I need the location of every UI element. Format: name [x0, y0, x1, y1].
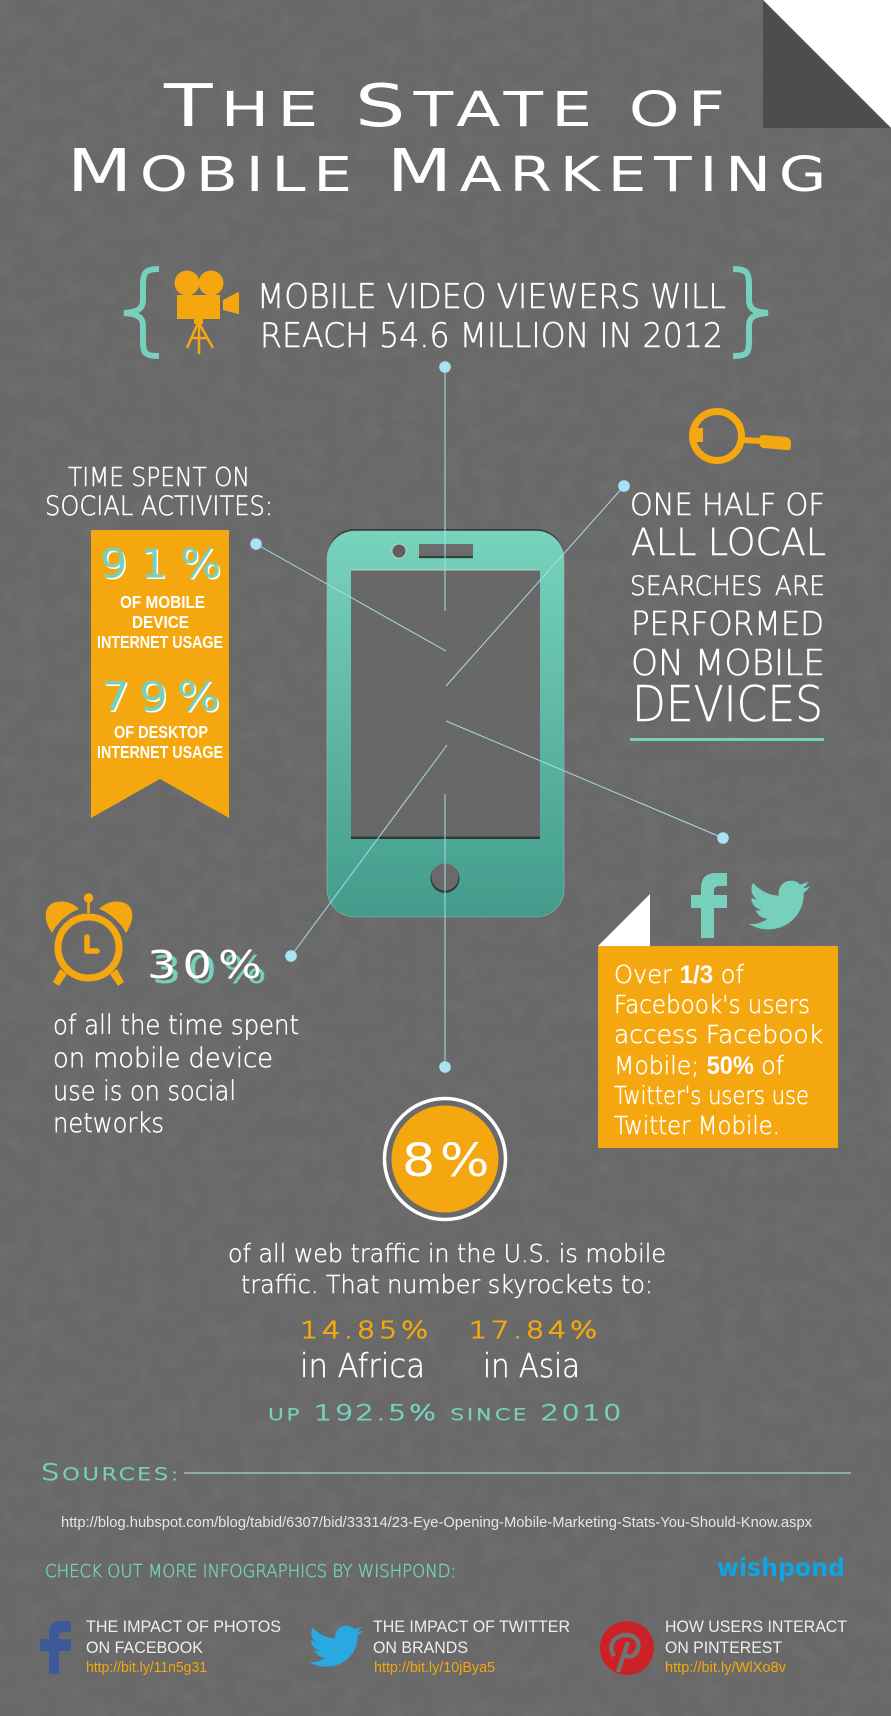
- icon: facebook f teal: [691, 873, 727, 938]
- icon: facebook f blue: [40, 1621, 71, 1674]
- logo: wishpond: wishpond: [717, 1553, 845, 1582]
- stat: 91%: 91%: [100, 542, 234, 588]
- promo: facebook article: THE IMPACT OF PHOTOS: [86, 1617, 281, 1636]
- title: M OBILE M ARKETING: [67, 136, 834, 205]
- text: time spent on social networks: networks: [53, 1108, 164, 1139]
- panel: facebook and twitter callout: Twitter Mobile.: [614, 1111, 780, 1140]
- stat: 30%: 30%: [147, 943, 268, 987]
- panel: facebook and twitter callout: Over 1/3 of: [614, 960, 744, 989]
- title: T HE S TATE OF: [163, 71, 733, 140]
- promo: twitter article: THE IMPACT OF TWITTER: [373, 1617, 570, 1636]
- source url: http://blog.hubspot.com/blog/tabid/6307/bid/33314/23-Eye-Opening-Mobile-Marketing-Stats-You-Should-Know.aspx: [61, 1514, 812, 1531]
- text: time spent on social networks: use is on social: [53, 1076, 236, 1107]
- stat: africa: 14.85%: [300, 1318, 432, 1344]
- text: time spent on social networks: of all the time spent: [53, 1010, 299, 1041]
- panel: orange ribbon: [91, 530, 236, 818]
- stat: africa: [300, 1318, 432, 1385]
- stat: asia: [469, 1318, 601, 1385]
- folded page corner: [763, 0, 891, 128]
- badge: 8%: 8%: [402, 1134, 494, 1187]
- promo: pinterest article: http://bit.ly/WlXo8v: [665, 1660, 787, 1676]
- text: one half of local searches: ALL LOCAL: [631, 521, 826, 564]
- heading: time spent on social: [45, 463, 273, 522]
- panel: facebook and twitter callout: access Facebook: [614, 1020, 823, 1049]
- sources heading: S OURCES:: [41, 1461, 181, 1486]
- stat: asia: 17.84%: [469, 1318, 601, 1344]
- heading: time spent on social: TIME SPENT ON: [68, 463, 250, 493]
- stat: 30%: 30%: [152, 948, 273, 992]
- connector dots: [250, 361, 729, 1073]
- connector lines: [256, 367, 723, 1067]
- promo: twitter article: http://bit.ly/10jBya5: [374, 1660, 495, 1676]
- promo: pinterest article: ON PINTEREST: [665, 1638, 782, 1657]
- label: of mobile device internet usage: [97, 592, 223, 652]
- right brace: [733, 269, 768, 356]
- icon: alarm clock: [46, 893, 132, 986]
- promo: facebook article: ON FACEBOOK: [86, 1638, 204, 1657]
- heading: time spent on social: SOCIAL ACTIVITES:: [45, 491, 273, 522]
- stat: 79%: 79%: [102, 676, 230, 722]
- panel: facebook and twitter callout: Twitter's users use: [614, 1081, 809, 1110]
- promo: pinterest article: [600, 1617, 847, 1676]
- text: one half of local searches: ON MOBILE: [631, 643, 825, 684]
- text: up since 2010: UP 192.5% SINCE 2010: [268, 1401, 624, 1425]
- promo: pinterest article: HOW USERS INTERACT: [665, 1617, 847, 1636]
- promo: facebook article: http://bit.ly/11n5g31: [86, 1660, 207, 1676]
- callout: mobile video viewers: REACH 54.6 MILLION IN 2012: [260, 316, 723, 356]
- phone camera: [392, 544, 406, 558]
- headline text: MOBILE VIDEO VIEWERS WILL: [257, 277, 726, 317]
- stat: 91%: 91%: [102, 543, 236, 589]
- icon: pinterest: [600, 1621, 654, 1675]
- left brace: [124, 269, 159, 356]
- title: [67, 71, 834, 205]
- promo: twitter article: [309, 1617, 570, 1676]
- label: of mobile device internet usage: INTERNET USAGE: [97, 632, 223, 652]
- panel: facebook and twitter callout: Mobile; 50% of: [614, 1051, 784, 1080]
- text: one half of local searches: PERFORMED: [631, 604, 824, 643]
- icon: film camera: [174, 270, 239, 354]
- promo: twitter article: ON BRANDS: [373, 1638, 468, 1657]
- text: time spent on social networks: on mobile device: [53, 1043, 273, 1074]
- text: web traffic: of all web traffic in the U.S. is mobile: [228, 1239, 666, 1268]
- label: of desktop internet usage: OF DESKTOP: [114, 722, 208, 742]
- label: of mobile device internet usage: DEVICE: [132, 612, 189, 632]
- icon: twitter bird blue: [309, 1626, 363, 1667]
- label: of desktop internet usage: INTERNET USAGE: [97, 742, 223, 762]
- text: one half of local searches: SEARCHES ARE: [630, 571, 825, 602]
- text: one half of local searches: [630, 488, 826, 741]
- phone speaker: [419, 544, 473, 558]
- stat: asia: in Asia: [483, 1346, 580, 1385]
- icon: phone: [327, 529, 564, 917]
- text: check out more: CHECK OUT MORE INFOGRAPHICS BY WISHPOND:: [45, 1561, 456, 1582]
- label: of desktop internet usage: [97, 722, 223, 762]
- badge: 8%: [384, 1098, 506, 1220]
- callout: mobile video viewers: [124, 269, 768, 356]
- text: web traffic: [228, 1239, 666, 1299]
- panel: facebook and twitter callout: Facebook's users: [614, 990, 810, 1019]
- phone screen: [351, 570, 540, 838]
- icon: magnifying glass: [692, 412, 791, 460]
- text: one half of local searches: ONE HALF OF: [630, 488, 825, 523]
- text: time spent on social networks: [53, 1010, 299, 1139]
- text: web traffic: traffic. That number skyrockets to:: [241, 1270, 653, 1299]
- promo: facebook article: [40, 1617, 281, 1676]
- text: one half of local searches: DEVICES: [632, 676, 823, 733]
- stat: 79%: 79%: [101, 674, 229, 720]
- icon: twitter bird teal: [749, 881, 810, 929]
- label: of mobile device internet usage: OF MOBILE: [120, 592, 205, 612]
- panel: facebook and twitter callout: [598, 894, 838, 1148]
- phone home button: [430, 864, 460, 893]
- stat: africa: in Africa: [300, 1346, 425, 1385]
